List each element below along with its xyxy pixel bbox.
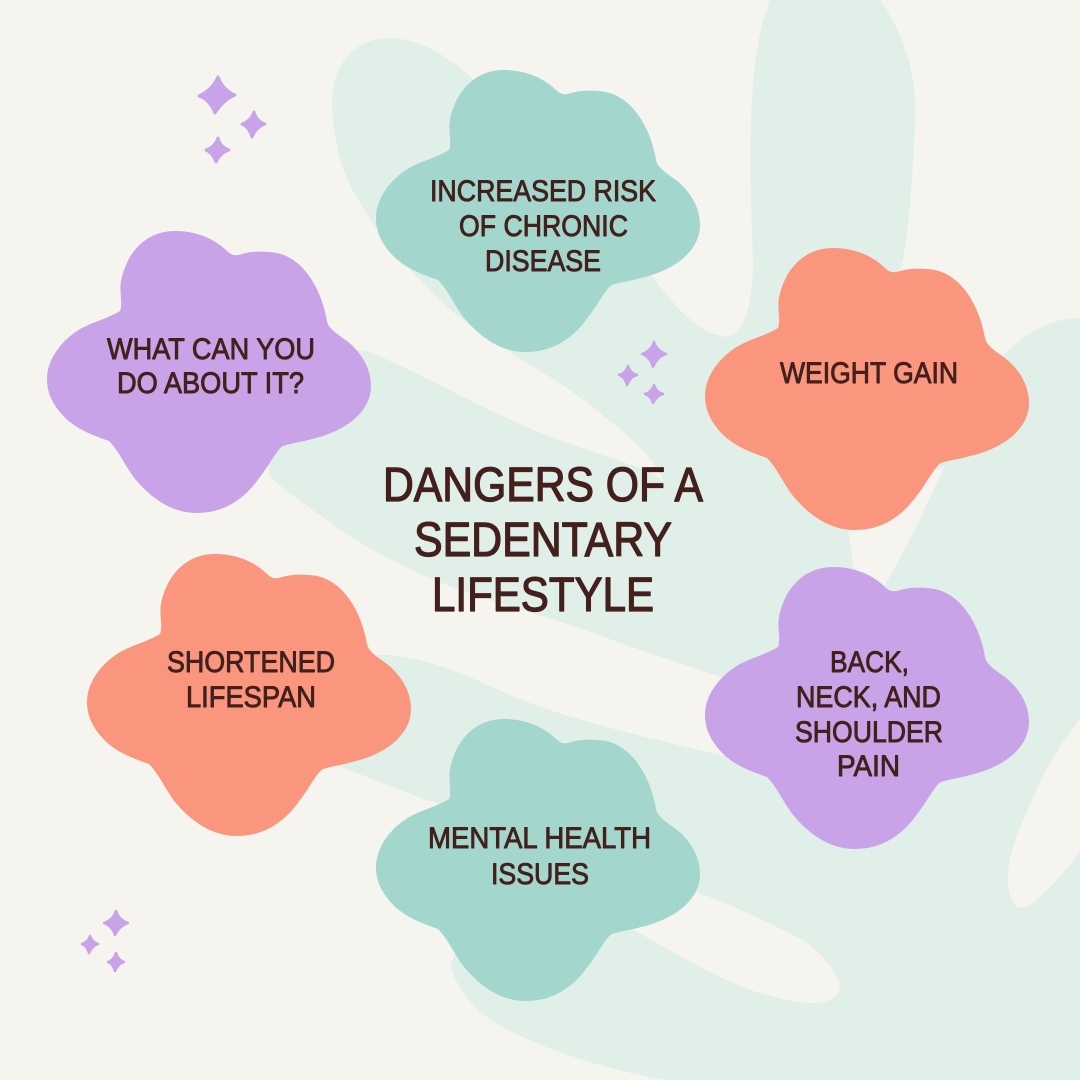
bubble: back, neck and shoulder pain: SHOULDER: [795, 716, 943, 749]
bubble: what can you do about it: [47, 231, 371, 513]
bubble: shortened lifespan: [87, 554, 411, 836]
bubble: mental health issues: MENTAL HEALTH: [428, 822, 651, 855]
title: LIFESTYLE: [432, 569, 654, 622]
bubble: mental health issues: ISSUES: [491, 858, 589, 891]
sparkles: center: [619, 342, 666, 403]
bubble: back, neck and shoulder pain: PAIN: [837, 750, 900, 783]
background leaf shapes: [265, 0, 1080, 1080]
bubble: what can you do about it: DO ABOUT IT?: [117, 367, 304, 400]
bubble: back, neck and shoulder pain: NECK, AND: [796, 681, 941, 714]
bubble: increased risk of chronic disease: [376, 70, 700, 352]
bubble: weight gain: [705, 248, 1029, 530]
bubble: back, neck and shoulder pain: [705, 567, 1029, 849]
title: [383, 459, 703, 622]
cream streak at the right edge: [1008, 719, 1080, 908]
title: SEDENTARY: [414, 514, 672, 567]
bubble: weight gain: WEIGHT GAIN: [780, 357, 958, 390]
bubble: increased risk of chronic disease: OF CHRONIC: [459, 210, 628, 243]
bubble: mental health issues: [376, 719, 700, 1001]
bubble: increased risk of chronic disease: DISEASE: [485, 245, 601, 278]
bubble: increased risk of chronic disease: INCREASED RISK: [430, 175, 656, 208]
bubble: back, neck and shoulder pain: BACK,: [830, 646, 909, 679]
bubble: shortened lifespan: SHORTENED: [167, 646, 335, 679]
sparkles: top left: [199, 77, 265, 162]
sparkles: bottom left: [82, 911, 128, 971]
cream wedge under the orange bubble: [847, 465, 945, 585]
bubble: what can you do about it: WHAT CAN YOU: [107, 333, 315, 366]
title: DANGERS OF A: [383, 459, 703, 512]
bubble: shortened lifespan: LIFESPAN: [186, 681, 316, 714]
cream streak at the bottom: [625, 885, 840, 1003]
